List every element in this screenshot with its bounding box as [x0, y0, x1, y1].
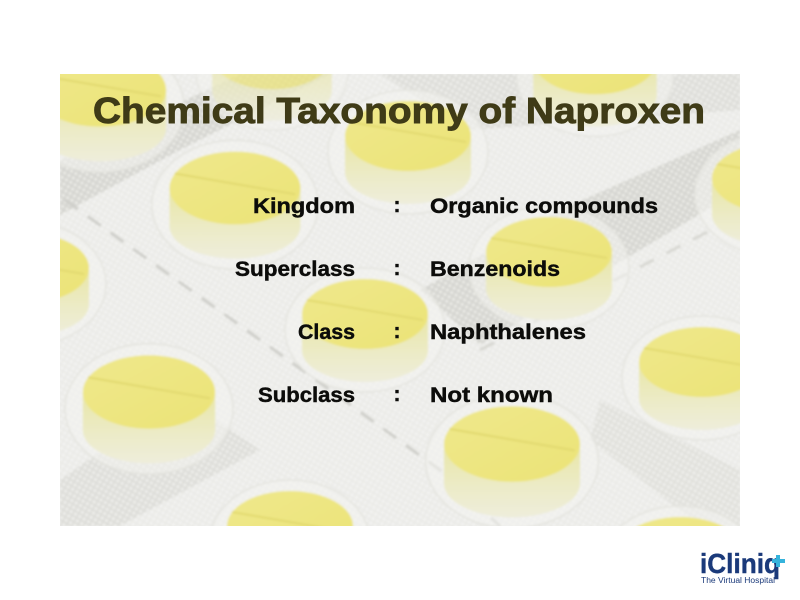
row: Kingdom: Organic compounds: [430, 195, 658, 218]
row: Class: Naphthalenes: [430, 321, 586, 344]
row: Subclass: Subclass: [258, 384, 355, 407]
row: Subclass: Not known: [430, 384, 553, 407]
logo: iCliniq: iCliniq: [700, 548, 780, 579]
title: Chemical Taxonomy of Naproxen: [93, 90, 705, 131]
row: Class: Class: [298, 321, 355, 344]
row: Kingdom: [253, 194, 658, 218]
row: Kingdom: :: [394, 194, 400, 217]
row: Subclass: :: [394, 383, 400, 406]
row: Kingdom: Kingdom: [253, 195, 355, 218]
row: Superclass: Superclass: [235, 258, 355, 281]
panel: blister pack photo background: [60, 74, 740, 526]
row: Superclass: [235, 257, 560, 281]
logo: iCliniq: The Virtual Hospital: [701, 576, 775, 585]
row: Superclass: Benzenoids: [430, 258, 560, 281]
row: Superclass: :: [394, 257, 400, 280]
icon: plus: [772, 555, 785, 567]
row: Subclass: [258, 383, 553, 407]
row: Class: [298, 320, 586, 344]
row: Class: :: [394, 320, 400, 343]
